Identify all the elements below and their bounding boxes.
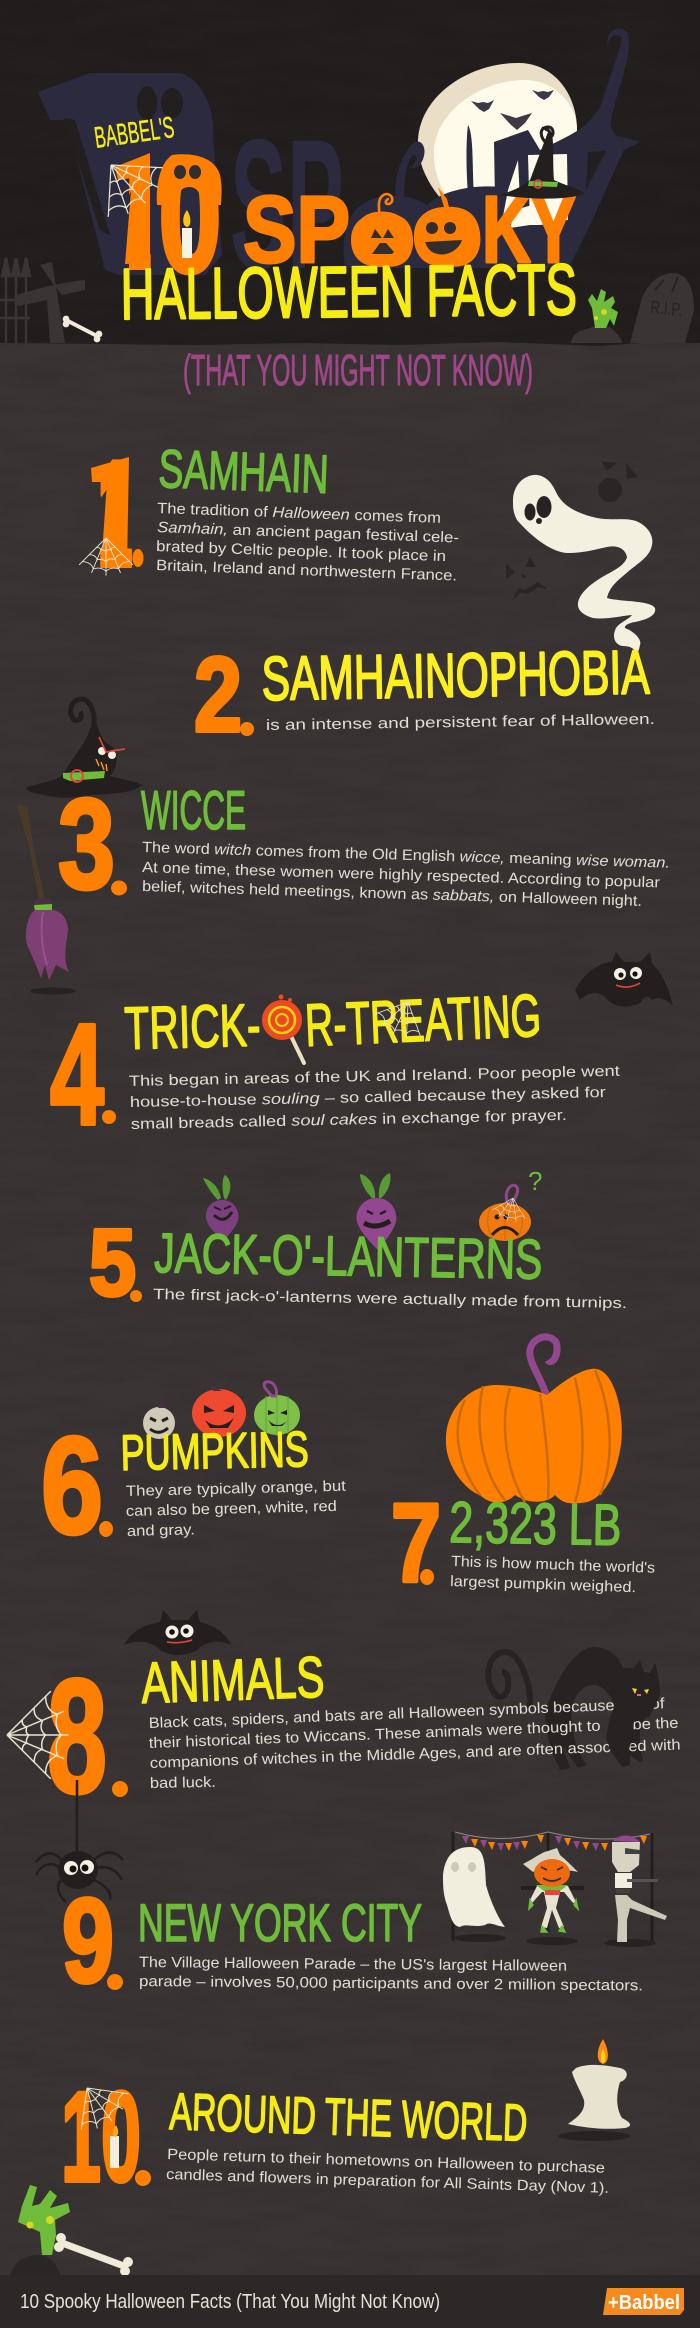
shadow title lettering bbox=[38, 25, 640, 326]
question mark: ? bbox=[528, 1166, 542, 1196]
cobweb on heading bbox=[374, 1002, 420, 1048]
broom shadow bbox=[30, 988, 76, 994]
body text: This is how much the world's bbox=[451, 1553, 655, 1577]
ghost bbox=[513, 475, 655, 653]
heading: PUMPKINS bbox=[120, 1421, 309, 1481]
body text bbox=[139, 1954, 643, 1994]
icon: bat bbox=[575, 952, 673, 1006]
moon bbox=[418, 63, 577, 225]
candle bbox=[182, 210, 192, 258]
body text: of bbox=[650, 1695, 666, 1713]
sad pumpkin bbox=[479, 1185, 531, 1241]
title: 10: 1 bbox=[126, 125, 152, 304]
background: night sky bbox=[0, 0, 700, 346]
body text: This began in areas of the UK and Ireland. Poor people went bbox=[129, 1063, 621, 1090]
title: 10: 0 bbox=[158, 127, 222, 306]
body text bbox=[142, 839, 670, 910]
tombstone bbox=[630, 273, 694, 343]
body text: Black cats, spiders, and bats are all Halloween symbols because bbox=[149, 1697, 615, 1732]
body text: belief, witches held meetings, known as sabbats, on Halloween night. bbox=[142, 878, 642, 910]
panel: fact 8 bbox=[7, 1610, 681, 1902]
heading: TRICK- bbox=[124, 991, 261, 1062]
heading: ANIMALS bbox=[140, 1645, 325, 1716]
spider bbox=[36, 1780, 123, 1902]
number 1 bbox=[79, 429, 144, 599]
melting candle bbox=[558, 2039, 630, 2141]
heading: JACK-O'-LANTERNS bbox=[154, 1221, 543, 1291]
heading bbox=[124, 982, 542, 1063]
dirt mound bbox=[10, 2255, 60, 2275]
gate bbox=[0, 258, 30, 343]
tombstone: R.I.P. bbox=[650, 297, 683, 320]
title: pumpkin O one: O bbox=[352, 198, 412, 281]
heading: NEW YORK CITY bbox=[138, 1894, 422, 1953]
white pumpkin bbox=[143, 1401, 175, 1439]
mummy costume bbox=[604, 1836, 667, 1947]
scarecrow costume bbox=[521, 1848, 584, 1945]
number 2: 2 bbox=[194, 636, 242, 754]
panel: fact 4 bbox=[50, 982, 621, 1155]
lollipop bbox=[262, 994, 304, 1063]
body text: their historical ties to Wiccans. These animals were thought to bbox=[149, 1718, 601, 1752]
header illustration bbox=[0, 25, 694, 343]
zombie hand bbox=[588, 289, 618, 328]
eyes of zero bbox=[174, 165, 201, 179]
body text bbox=[129, 1063, 621, 1133]
body text: candles and flowers in preparation for All Saints Day (Nov 1). bbox=[166, 2166, 609, 2197]
bone bbox=[55, 2234, 132, 2275]
number 4: 4 bbox=[50, 994, 104, 1155]
faint face marks bbox=[506, 461, 638, 601]
body text bbox=[156, 500, 459, 585]
panel: fact 3 bbox=[17, 699, 670, 994]
body text: The tradition of Halloween comes from bbox=[157, 500, 441, 527]
footer bbox=[0, 2275, 700, 2328]
black cat bbox=[488, 1647, 660, 1770]
body text: They are typically orange, but bbox=[126, 1478, 347, 1500]
parade bunting bbox=[453, 1832, 652, 1942]
cross bbox=[16, 262, 85, 343]
footer title: 10 Spooky Halloween Facts (That You Might Not Know) bbox=[20, 2291, 440, 2313]
body text: The word witch comes from the Old English wicce, meaning wise woman. bbox=[142, 839, 670, 872]
moon bats bbox=[471, 90, 554, 130]
shadow title lettering: SP bbox=[230, 102, 344, 308]
number 6: 6 bbox=[41, 1409, 103, 1563]
body text bbox=[166, 2146, 609, 2197]
shadow title lettering: 0 bbox=[118, 25, 218, 326]
number 9: 9 bbox=[62, 1874, 114, 2008]
big pumpkin bbox=[446, 1337, 622, 1503]
body text: companions of witches in the Middle Ages, and are often associated with bbox=[150, 1736, 681, 1772]
title: Babbel's: BABBEL'S bbox=[92, 111, 176, 155]
panel: fact 6 bbox=[41, 1382, 347, 1563]
title: KY: KY bbox=[482, 177, 576, 283]
red pumpkin bbox=[192, 1384, 246, 1437]
Babbel logo: +Babbel bbox=[608, 2292, 680, 2314]
small candle bbox=[110, 2125, 119, 2168]
number 10 bbox=[61, 2066, 151, 2209]
panel: fact 10 bbox=[61, 2039, 630, 2209]
shadow title lettering: 1 bbox=[100, 25, 130, 326]
panel: fact 5 bbox=[89, 1166, 627, 1316]
body text: brated by Celtic people. It took place in bbox=[156, 538, 446, 565]
body text bbox=[149, 1695, 681, 1792]
turnip one bbox=[203, 1175, 238, 1240]
body text: The Village Halloween Parade – the US's largest Halloween bbox=[139, 1954, 567, 1975]
body text: and gray. bbox=[127, 1521, 195, 1540]
number 3: 3 bbox=[58, 773, 115, 916]
title: pumpkin O two: O bbox=[416, 198, 476, 281]
dirt mound bbox=[571, 325, 622, 343]
body text: largest pumpkin weighed. bbox=[450, 1573, 636, 1596]
body text: small breads called soul cakes in exchange for prayer. bbox=[131, 1107, 567, 1133]
body text: The first jack-o'-lanterns were actually made from turnips. bbox=[153, 1286, 627, 1312]
panel: fact 9 bbox=[62, 1832, 667, 2008]
body text: can also be green, white, red bbox=[126, 1498, 337, 1520]
cat head and chest in front of text bbox=[606, 1660, 660, 1754]
body text: is an intense and persistent fear of Halloween. bbox=[266, 711, 655, 734]
turnip two bbox=[356, 1173, 396, 1250]
heading: WICCE bbox=[141, 779, 246, 841]
cobweb bbox=[108, 165, 163, 220]
green pumpkin bbox=[254, 1382, 300, 1436]
body text bbox=[450, 1553, 655, 1596]
panel: fact 7 bbox=[391, 1337, 655, 1605]
number 8: 8 bbox=[47, 1646, 107, 1827]
panel: fact 1 bbox=[79, 429, 655, 653]
number 7: 7 bbox=[391, 1481, 441, 1605]
title: SP: SP bbox=[243, 177, 350, 283]
broom bbox=[17, 805, 69, 980]
body text: Britain, Ireland and northwestern France. bbox=[156, 557, 457, 585]
body text: At one time, these women were highly respected. According to popular bbox=[142, 859, 660, 891]
heading: R-TREATING bbox=[304, 982, 542, 1059]
body text: People return to their hometowns on Halloween to purchase bbox=[167, 2146, 605, 2177]
body text: parade – involves 50,000 participants and over 2 million spectators. bbox=[139, 1973, 643, 1994]
number 8 bbox=[7, 1646, 128, 1827]
number 10: 10 bbox=[61, 2066, 141, 2209]
witch hat on title bbox=[500, 127, 585, 199]
panel: fact 2 bbox=[194, 636, 655, 754]
body text: bad luck. bbox=[150, 1774, 216, 1792]
zombie hand bbox=[18, 2185, 70, 2255]
heading: 2,323 LB bbox=[449, 1490, 622, 1558]
witch hat with owl bbox=[26, 699, 142, 798]
body text: be the bbox=[632, 1715, 679, 1733]
body text: house-to-house souling – so called because they asked for bbox=[130, 1084, 606, 1111]
number 5: 5 bbox=[89, 1210, 136, 1316]
number 1: 1 bbox=[97, 429, 133, 599]
bat bbox=[124, 1610, 231, 1655]
heading: SAMHAIN bbox=[158, 439, 330, 505]
body text: Samhain, an ancient pagan festival cele- bbox=[157, 519, 459, 547]
body text bbox=[126, 1478, 347, 1540]
bone bbox=[63, 316, 102, 342]
ghost costume bbox=[443, 1847, 506, 1942]
